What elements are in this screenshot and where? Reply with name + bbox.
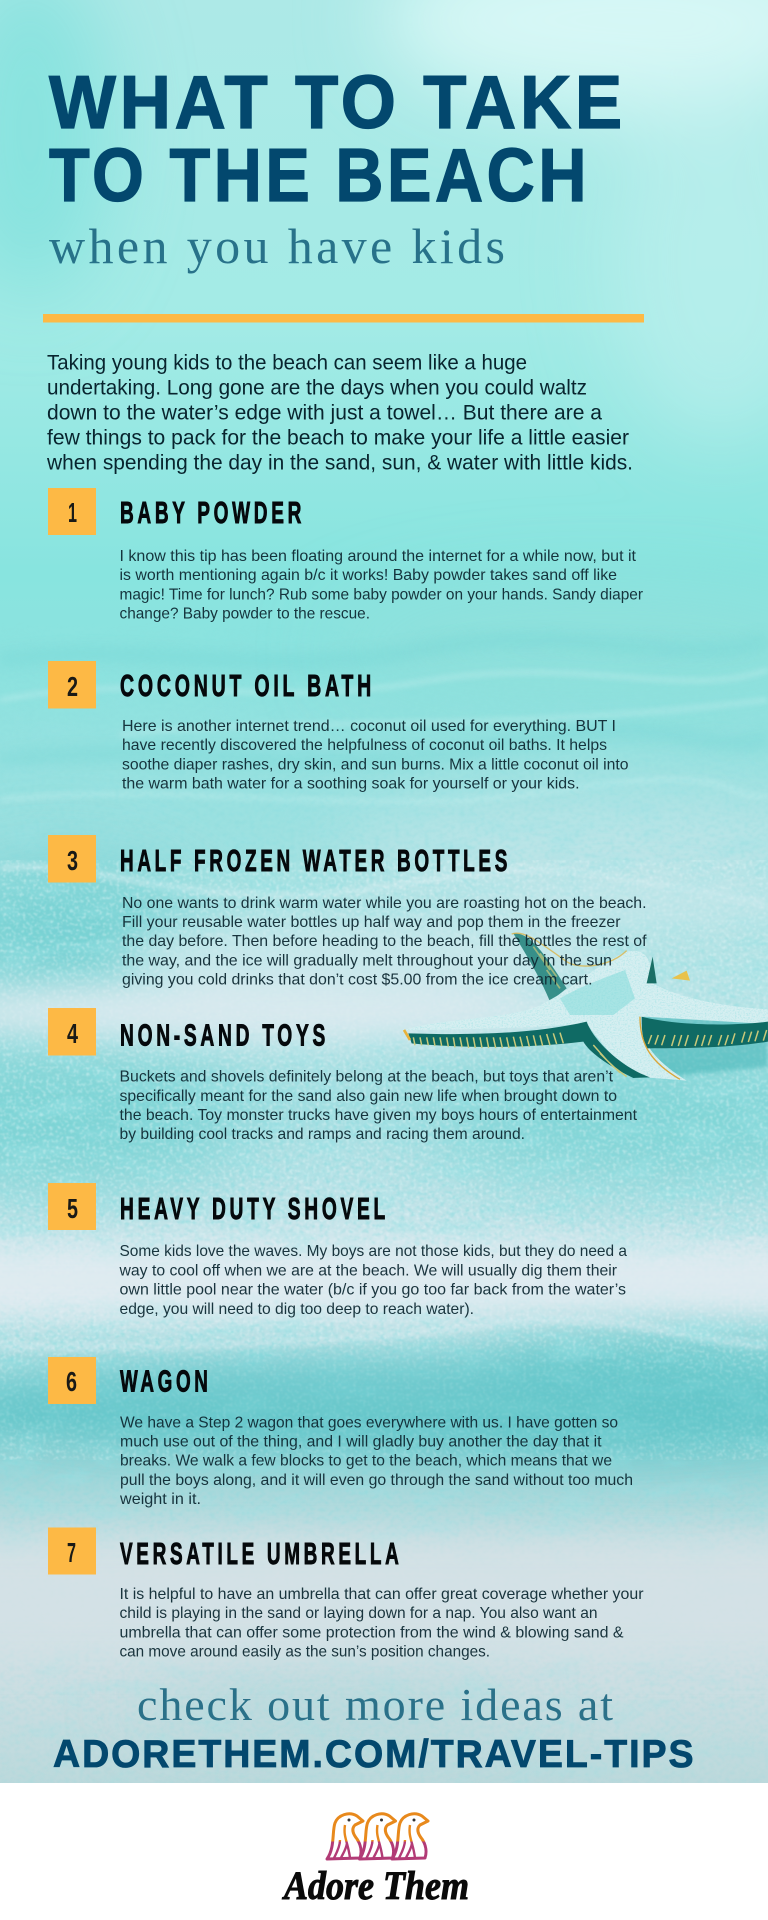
body text 3: the way, and the ice will gradually melt throughout your day in the sun bbox=[122, 952, 612, 969]
title: WHAT TO TAKE bbox=[49, 60, 626, 144]
body text 3: No one wants to drink warm water while you are roasting hot on the beach. bbox=[122, 895, 646, 912]
item 5: heavy duty shovel bbox=[48, 1183, 627, 1318]
body text 1: magic! Time for lunch? Rub some baby powder on your hands. Sandy diaper bbox=[120, 586, 644, 603]
body text 7: can move around easily as the sun’s position changes. bbox=[120, 1644, 490, 1661]
body text 4: Buckets and shovels definitely belong at the beach, but toys that aren’t bbox=[120, 1069, 614, 1086]
number badge 5: 5 bbox=[67, 1193, 78, 1224]
body text 1: is worth mentioning again b/c it works! Baby powder takes sand off like bbox=[120, 567, 617, 584]
sand ripples bbox=[0, 640, 768, 760]
item 7: versatile umbrella bbox=[48, 1528, 644, 1661]
intro paragraph: few things to pack for the beach to make your life a little easier bbox=[47, 426, 629, 450]
body text 6: We have a Step 2 wagon that goes everywhere with us. I have gotten so bbox=[120, 1414, 618, 1431]
number badge 7 bbox=[48, 1528, 96, 1574]
body text 6: much use out of the thing, and I will gladly buy another the day that it bbox=[120, 1434, 602, 1450]
item 4: non-sand toys bbox=[48, 1008, 638, 1143]
heading 1: BABY POWDER bbox=[120, 495, 305, 530]
intro paragraph: when spending the day in the sand, sun, & water with little kids. bbox=[46, 452, 633, 474]
number badge 7: 7 bbox=[67, 1537, 76, 1568]
body text 4: by building cool tracks and ramps and racing them around. bbox=[120, 1126, 525, 1143]
heading 7: VERSATILE UMBRELLA bbox=[120, 1536, 402, 1571]
heading 6: WAGON bbox=[120, 1364, 212, 1398]
body text 7: It is helpful to have an umbrella that can offer great coverage whether your bbox=[120, 1586, 644, 1603]
heading 5: HEAVY DUTY SHOVEL bbox=[120, 1191, 389, 1226]
title bbox=[49, 60, 626, 217]
body text 5 bbox=[119, 1243, 627, 1318]
body text 2: Here is another internet trend… coconut oil used for everything. BUT I bbox=[122, 718, 616, 735]
item 6: wagon bbox=[48, 1357, 633, 1508]
body text 2: soothe diaper rashes, dry skin, and sun burns. Mix a little coconut oil into bbox=[122, 756, 629, 773]
number badge 6: 6 bbox=[66, 1366, 77, 1397]
divider bar bbox=[43, 314, 644, 322]
number badge 1 bbox=[48, 488, 96, 535]
number badge 5 bbox=[48, 1183, 96, 1230]
body text 3: Fill your reusable water bottles up half way and pop them in the freezer bbox=[122, 914, 621, 931]
body text 6: weight in it. bbox=[119, 1491, 201, 1508]
body text 1: I know this tip has been floating around the internet for a while now, but it bbox=[120, 548, 637, 565]
icon: three penguins bbox=[327, 1814, 428, 1859]
website link: ADORETHEM.COM/TRAVEL-TIPS bbox=[53, 1733, 696, 1776]
body text 3: giving you cold drinks that don’t cost $5.00 from the ice cream cart. bbox=[122, 972, 592, 989]
item 3: half frozen water bottles bbox=[48, 835, 647, 989]
panel: white footer bbox=[0, 1783, 768, 1920]
number badge 2: 2 bbox=[67, 671, 78, 702]
pale sand and deep teal zones bbox=[0, 879, 768, 1660]
body text 2: have recently discovered the helpfulness of coconut oil baths. It helps bbox=[122, 737, 607, 754]
number badge 4 bbox=[48, 1008, 96, 1056]
logo: Adore Them bbox=[281, 1814, 469, 1908]
sand dune edge bbox=[0, 867, 768, 1347]
number badge 1: 1 bbox=[68, 497, 77, 528]
intro paragraph bbox=[46, 352, 633, 474]
body text 3: the day before. Then before heading to the beach, fill the bottles the rest of bbox=[122, 933, 647, 950]
body text 7: umbrella that can offer some protection from the wind & blowing sand & bbox=[120, 1624, 624, 1641]
body text 2: the warm bath water for a soothing soak for yourself or your kids. bbox=[122, 776, 580, 793]
item 2: coconut oil bath bbox=[48, 661, 629, 793]
intro paragraph: undertaking. Long gone are the days when you could waltz bbox=[47, 376, 587, 400]
body text 5: own little pool near the water (b/c if you go too far back from the water’s bbox=[120, 1282, 626, 1299]
body text 6 bbox=[119, 1414, 633, 1508]
body text 5: way to cool off when we are at the beach. We will usually dig them their bbox=[119, 1262, 618, 1279]
logo wordmark: Adore Them bbox=[281, 1863, 469, 1908]
subtitle: when you have kids bbox=[49, 218, 505, 274]
intro paragraph: Taking young kids to the beach can seem like a huge bbox=[47, 352, 527, 374]
number badge 3 bbox=[48, 835, 96, 882]
number badge 4: 4 bbox=[67, 1018, 78, 1049]
body text 6: pull the boys along, and it will even go through the sand without too much bbox=[120, 1472, 633, 1489]
body text 1 bbox=[120, 548, 644, 623]
body text 3 bbox=[122, 895, 647, 989]
intro paragraph: down to the water’s edge with just a towel… But there are a bbox=[47, 402, 602, 424]
body text 2 bbox=[122, 718, 629, 793]
body text 4 bbox=[120, 1069, 638, 1143]
body text 5: Some kids love the waves. My boys are not those kids, but they do need a bbox=[120, 1243, 627, 1260]
number badge 3: 3 bbox=[67, 845, 78, 876]
heading 4: NON-SAND TOYS bbox=[120, 1018, 329, 1052]
item 1: baby powder bbox=[48, 488, 644, 623]
number badge 6 bbox=[48, 1357, 96, 1404]
call to action line: check out more ideas at bbox=[137, 1679, 613, 1730]
body text 7 bbox=[120, 1586, 644, 1661]
icon: starfish bbox=[400, 933, 768, 1083]
body text 7: child is playing in the sand or laying down for a nap. You also want an bbox=[120, 1605, 598, 1622]
heading 2: COCONUT OIL BATH bbox=[120, 668, 375, 703]
body text 5: edge, you will need to dig too deep to reach water). bbox=[120, 1301, 474, 1318]
title: TO THE BEACH bbox=[49, 133, 590, 217]
body text 1: change? Baby powder to the rescue. bbox=[120, 606, 370, 623]
number badge 2 bbox=[48, 661, 96, 708]
heading 3: HALF FROZEN WATER BOTTLES bbox=[120, 843, 511, 878]
body text 6: breaks. We walk a few blocks to get to the beach, which means that we bbox=[120, 1453, 612, 1470]
body text 4: specifically meant for the sand also gain new life when brought down to bbox=[120, 1088, 617, 1105]
body text 4: the beach. Toy monster trucks have given my boys hours of entertainment bbox=[120, 1107, 638, 1124]
